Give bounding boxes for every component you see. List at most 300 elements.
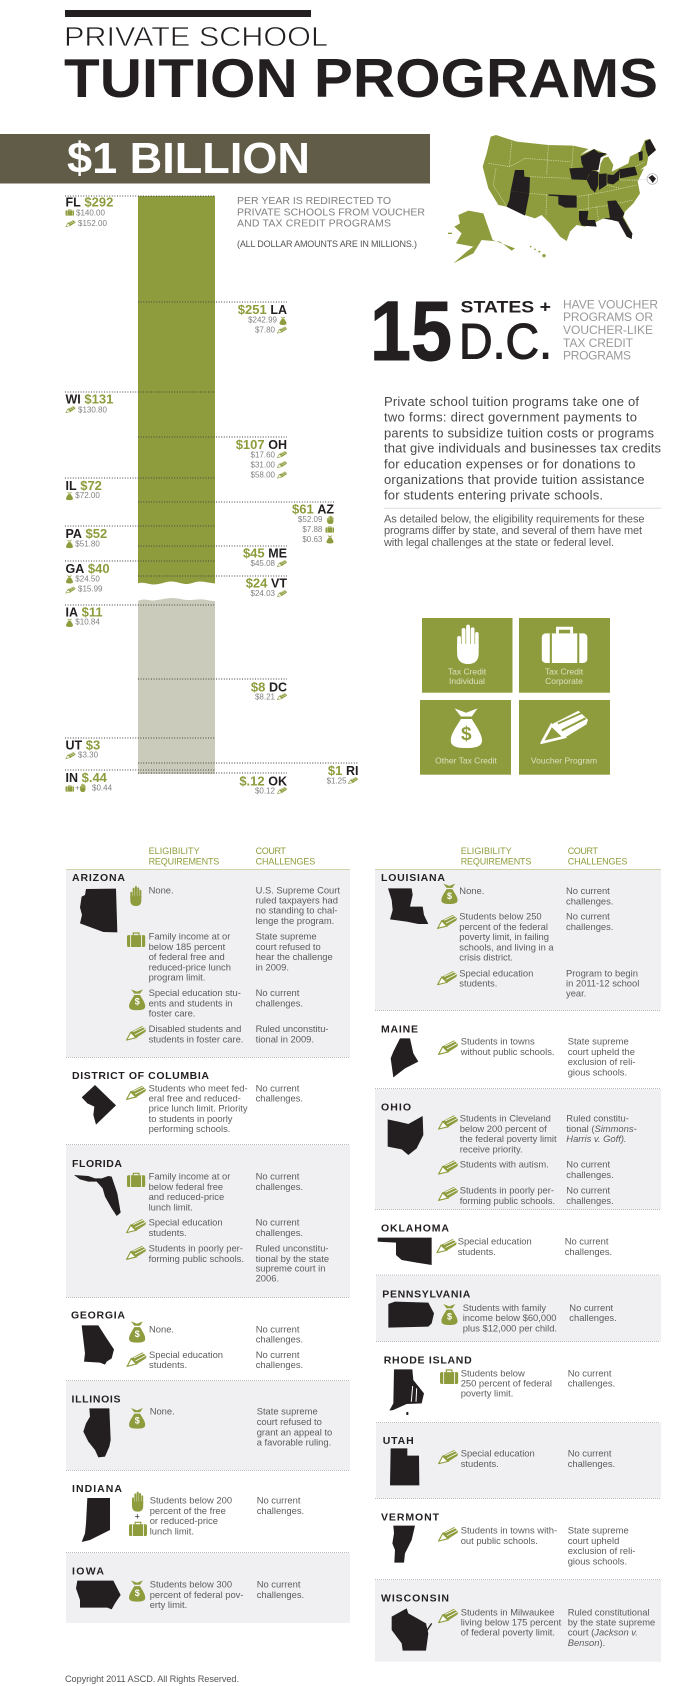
row: other tax credit: No current [257,1579,301,1590]
panel: Illinois [66,1381,350,1470]
row: tax credit individual: lenge the program. [256,915,334,926]
text block: eligibility note: programs differ by state, and several of them have met [384,525,642,537]
panel: Iowa [66,1553,350,1623]
banner: $1 billion: $1 BILLION [67,134,310,183]
title [64,10,658,109]
intro text: per year redirected: PER YEAR IS REDIRECTED TO [237,195,391,207]
row: individual plus corporate tax credit: challenges. [257,1505,304,1516]
legend item: other tax credit: $ [461,724,472,745]
row: other tax credit: $ [135,1588,140,1598]
label: LA: $242.99 [248,316,278,325]
panel: District of Columbia: DISTRICT OF COLUMBIA [72,1070,209,1082]
state shape: Pennsylvania [388,1302,434,1328]
row: other tax credit: Special education stu- [149,987,241,998]
row: voucher program: Ruled unconstitu- [256,1023,329,1034]
label: FL [66,195,113,228]
panel: Florida [66,1145,350,1298]
row: voucher special education: challenges. [256,1227,303,1238]
row: tax credit corporate: No current [256,1171,300,1182]
banner: $1 billion [0,134,430,184]
row: voucher program: students in foster care. [149,1033,243,1044]
intro text: per year redirected [237,195,425,249]
row: tax credit individual: ruled taxpayers had [256,894,338,906]
label: UT [66,737,100,760]
callout: 15 states + D.C.: STATES + [460,298,551,316]
row: other tax credit: No current [256,987,300,998]
row: voucher poverty limit: Students below 250 [459,911,542,922]
row: voucher program: State supreme [568,1036,629,1047]
row: tax credit corporate [440,1367,615,1399]
row: voucher special education [127,1217,303,1238]
label: AZ [292,502,334,544]
row: voucher poverty limit: schools, and living in a [459,941,554,952]
row: voucher program: Students in towns with- [461,1525,557,1536]
state shape: Georgia [82,1325,114,1365]
row: voucher autism [439,1159,614,1180]
text block: program forms: that give individuals and businesses tax credits [384,441,662,456]
label: WI: $130.80 [78,406,107,415]
row: voucher program [127,1349,303,1370]
row: voucher program: Special education [458,1236,532,1247]
row: voucher program: No current [256,1082,300,1093]
row: other tax credit: challenges. [256,997,303,1008]
panel: Georgia [71,1310,303,1370]
row: voucher special education: No current [256,1217,300,1228]
row: voucher Cleveland: the federal poverty limit [460,1133,557,1144]
legend: program types [420,618,610,775]
row: individual plus corporate tax credit: + [135,1512,140,1522]
legend item: tax credit corporate [519,618,610,693]
state shape: Maine [391,1038,418,1077]
row: other tax credit: a favorable ruling. [257,1436,331,1448]
panel: Indiana [72,1483,304,1542]
legend item: tax credit corporate: Tax Credit [545,666,584,676]
row: tax credit individual: no standing to chal- [256,905,337,916]
intro text: per year redirected: AND TAX CREDIT PROGRAMS [237,218,391,230]
label: AZ: $7.88 [302,525,323,534]
text block: program forms: Private school tuition programs take one of [384,394,639,409]
row: voucher poverty limit: crisis district. [459,952,513,962]
row: tax credit corporate: Family income at or [149,1171,230,1182]
label: IN: + [75,783,80,792]
row: other tax credit: Students with family [463,1302,546,1313]
state shape: Arizona [80,889,117,932]
panel: Indiana: INDIANA [72,1483,122,1495]
row: voucher program [127,1082,303,1134]
row: voucher program: living below 175 percent [461,1616,562,1628]
row: voucher program: challenges. [256,1092,303,1104]
row: voucher poorly performing: No current [566,1185,610,1196]
row: voucher program: Ruled constitutional [568,1606,650,1617]
label: IN [66,770,113,792]
state shape: District of Columbia [82,1085,116,1125]
label: GA: $15.99 [78,585,103,594]
row: voucher special education [438,967,639,999]
column headers: right: REQUIREMENTS [461,857,531,867]
state shape: Rhode Island [389,1369,424,1415]
callout: 15 states + D.C.: 15 [370,284,452,378]
row: other tax credit: None. [150,1406,175,1417]
text block: program forms: for education expenses or for donations to [384,456,636,471]
row: voucher program: Benson). [568,1637,605,1648]
row: voucher autism: Students with autism. [460,1159,549,1170]
gray bar segment [138,598,215,774]
row: voucher program: court upheld the [568,1046,635,1057]
row: other tax credit: $ [135,1416,140,1426]
label: OH: $31.00 [251,460,276,469]
panel: Arizona: ARIZONA [72,872,125,884]
row: voucher program [437,1236,612,1257]
row: voucher program: Special education [461,1448,535,1459]
row: voucher poorly performing: forming public schools. [149,1253,244,1264]
row: voucher special education: Special education [149,1217,223,1228]
row: other tax credit: percent of federal pov- [150,1589,244,1600]
label: OH: $17.60 [251,450,276,459]
row: voucher program: Disabled students and [149,1023,241,1034]
label: RI: $1.25 [327,776,347,785]
label: DC [251,679,287,701]
contiguous states [483,135,658,241]
legend item: tax credit individual: Tax Credit [448,666,487,676]
row: other tax credit: challenges. [257,1589,304,1600]
row: tax credit individual: None. [149,884,174,895]
row: other tax credit [129,1579,304,1610]
row: individual plus corporate tax credit [129,1492,304,1536]
row: voucher poverty limit [438,911,613,962]
row: voucher program: challenges. [565,1246,612,1257]
row: tax credit corporate: challenges. [256,1181,303,1192]
row: voucher program: Special education [149,1349,223,1360]
column headers: left [149,846,315,867]
row: voucher program: Students in Milwaukee [461,1606,555,1617]
row: voucher program: out public schools. [461,1535,538,1546]
panel: Louisiana [375,870,661,1010]
row: other tax credit [129,987,303,1018]
row: voucher special education: Special education [459,967,533,978]
row: voucher program: eral free and reduced- [149,1092,241,1104]
column headers: left: ELIGIBILITY [149,846,200,856]
row: other tax credit: $ [135,1329,140,1339]
row: voucher poorly performing [439,1185,614,1206]
label: VT [246,576,287,598]
row: other tax credit: court refused to [257,1416,322,1427]
row: individual plus corporate tax credit: lunch limit. [150,1525,194,1536]
row: voucher program: gious schools. [568,1066,627,1077]
label: OK: $.12 OK [239,773,287,788]
state shape: Ohio [388,1116,423,1155]
copyright: Copyright 2011 ASCD. All Rights Reserved. [65,1674,239,1684]
label: ME: $45 ME [243,546,287,561]
row: tax credit corporate: State supreme [256,931,317,942]
row: voucher autism: challenges. [566,1169,614,1180]
label: AZ: $0.63 [302,535,323,544]
panel: Wisconsin: WISCONSIN [381,1593,449,1605]
row: voucher Cleveland: Harris v. Goff). [566,1133,627,1144]
column headers: left: CHALLENGES [256,857,315,867]
label: WI [66,391,113,415]
row: voucher Cleveland: tional (Simmons- [566,1123,637,1134]
panel: Pennsylvania [376,1276,661,1341]
row: voucher program: No current [256,1349,300,1360]
row: voucher poorly performing: supreme court in [256,1263,325,1274]
label: GA: GA $40 [66,561,110,576]
Alaska and Hawaii [448,211,546,263]
state shape: Utah [390,1448,419,1485]
row: voucher program [127,1023,329,1044]
row: voucher program: by the state supreme [568,1616,655,1628]
text block: eligibility note [383,513,644,549]
row: other tax credit: grant an appeal to [257,1426,332,1437]
label: LA [238,302,287,335]
text block: program forms: for students entering private schools. [384,487,603,502]
row: voucher program: students. [458,1246,496,1257]
row: other tax credit: income below $60,000 [463,1312,557,1323]
column headers: right: COURT [568,846,598,856]
title: TUITION PROGRAMS [64,47,658,109]
label: IN: IN $.44 [66,770,108,785]
column headers: left: REQUIREMENTS [149,857,219,867]
row: tax credit corporate: program limit. [149,972,205,982]
panel: Florida: FLORIDA [72,1158,122,1170]
state shape: Wisconsin [392,1608,432,1651]
panel: Pennsylvania: PENNSYLVANIA [382,1288,471,1300]
row: voucher poorly performing: Students in poorly per- [149,1243,243,1254]
row: tax credit corporate [127,1171,303,1212]
callout: 15 states + D.C. [370,284,658,378]
callout: 15 states + D.C.: PROGRAMS OR [563,310,653,324]
label: IA: IA $11 [66,605,103,620]
panel: Utah: UTAH [383,1435,414,1447]
row: other tax credit: None. [149,1323,174,1334]
state shape: Louisiana [388,888,428,924]
panel: Oklahoma: OKLAHOMA [381,1222,449,1234]
row: other tax credit: challenges. [566,895,613,906]
row: voucher poverty limit: poverty limit, in failing [459,931,549,942]
panel: Utah [376,1423,661,1498]
label: OH [236,437,287,480]
row: other tax credit: Students below 300 [150,1579,232,1590]
panel: Rhode Island: RHODE ISLAND [384,1354,472,1366]
row: voucher Cleveland [439,1113,637,1154]
row: voucher program: students. [461,1458,499,1469]
row: voucher poverty limit: percent of the federal [459,921,548,932]
panel: Ohio: OHIO [381,1101,411,1113]
row: tax credit individual: U.S. Supreme Court [256,884,340,895]
row: voucher program [439,1525,635,1566]
label: LA: $7.80 [255,326,276,335]
row: other tax credit: $ [135,996,140,1006]
row: tax credit corporate: of federal free and [149,951,225,962]
label: IN: $0.44 [92,783,113,792]
row: voucher program: challenges. [568,1458,615,1469]
row: voucher autism: No current [566,1159,610,1170]
label: VT: $24.03 [251,589,276,598]
row: tax credit corporate: Family income at or [149,931,230,942]
row: individual plus corporate tax credit: or reduced-price [150,1515,218,1526]
row: voucher poorly performing [127,1243,329,1284]
column headers: right: ELIGIBILITY [461,846,512,856]
row: voucher program: gious schools. [568,1555,627,1566]
panel: Maine: MAINE [381,1023,418,1035]
row: voucher program: challenges. [256,1359,303,1370]
row: voucher program: tional in 2009. [256,1033,314,1044]
label: VT: $24 VT [246,576,287,591]
callout: 15 states + D.C.: HAVE VOUCHER [563,297,658,311]
row: tax credit corporate: in 2009. [256,961,289,972]
row: other tax credit: challenges. [569,1312,617,1323]
row: tax credit corporate: reduced-price lunch [149,961,231,972]
row: voucher Cleveland: receive priority. [460,1143,523,1154]
label: IA: $10.84 [75,618,100,627]
row: other tax credit [129,1321,303,1344]
label: GA [66,561,110,594]
legend item: other tax credit [420,700,511,775]
label: WI: WI $131 [66,391,113,406]
panel: Vermont: VERMONT [381,1511,440,1523]
row: voucher program [439,1606,655,1648]
row: tax credit corporate: below federal free [149,1181,223,1192]
state shape: Illinois [83,1408,111,1457]
label: IL: IL $72 [66,478,102,493]
legend item: other tax credit: Other Tax Credit [435,755,498,765]
column headers: right: CHALLENGES [568,857,627,867]
row: other tax credit [441,884,613,906]
column headers: right [461,846,627,867]
row: tax credit corporate: No current [568,1367,612,1378]
row: tax credit corporate: lunch limit. [149,1201,193,1212]
row: voucher poorly performing: Students in poorly per- [460,1185,554,1196]
panel: Vermont [381,1511,635,1566]
label: DC: $8.21 [255,692,276,701]
row: voucher poverty limit: challenges. [566,921,613,932]
row: voucher Cleveland: below 200 percent of [460,1123,547,1134]
label: IL [66,478,102,500]
intro text: per year redirected: (ALL DOLLAR AMOUNTS ARE IN MILLIONS.) [237,239,417,249]
label: UT: $3.30 [78,751,99,760]
row: tax credit corporate: challenges. [568,1378,615,1388]
row: voucher program: Students who meet fed- [149,1082,248,1093]
row: tax credit corporate: poverty limit. [461,1388,513,1399]
row: voucher program: without public schools. [460,1046,555,1057]
row: other tax credit: challenges. [256,1334,303,1344]
label: DC: $8 DC [251,679,287,694]
legend item: voucher program [519,700,610,775]
row: voucher program: State supreme [568,1525,629,1536]
label: AZ: $61 AZ [292,502,334,517]
panel: Iowa: IOWA [72,1566,104,1578]
row: tax credit individual [130,884,340,926]
state shape: Oklahoma [378,1238,432,1265]
title: PRIVATE SCHOOL [64,21,328,52]
row: tax credit corporate: court refused to [256,941,321,952]
text block: program forms: two forms: direct government payments to [384,410,637,425]
row: other tax credit: ents and students in [149,997,233,1008]
row: voucher program: No current [565,1236,609,1247]
state shape: Indiana [82,1498,110,1542]
label: PA: PA $52 [66,526,107,541]
row: voucher program: students. [149,1359,187,1370]
label: RI [327,763,358,785]
bar chart: program spending by state [65,195,358,795]
row: voucher Cleveland: Ruled constitu- [566,1113,629,1124]
label: OH: $58.00 [251,471,276,480]
row: voucher special education: year. [566,988,586,999]
row: other tax credit [129,1406,332,1448]
row: other tax credit: plus $12,000 per child. [463,1322,557,1333]
panel: Illinois: ILLINOIS [72,1393,120,1405]
row: tax credit corporate: and reduced-price [149,1191,224,1202]
label: ME [243,546,287,568]
text block: program forms: organizations that provide tuition assistance [384,472,644,487]
row: individual plus corporate tax credit: percent of the free [150,1505,226,1516]
row: tax credit corporate: below 185 percent [149,941,226,952]
label: GA: $24.50 [75,574,100,583]
row: voucher poverty limit: No current [566,911,610,922]
row: voucher program: of federal poverty limit. [461,1627,555,1638]
row: other tax credit: $ [447,891,452,901]
label: FL: FL $292 [66,195,113,210]
label: PA [66,526,107,548]
label: IA [66,605,103,627]
row: other tax credit: No current [256,1323,300,1334]
row: voucher program: performing schools. [149,1123,230,1134]
row: voucher poorly performing: challenges. [566,1195,614,1206]
row: other tax credit: State supreme [257,1406,318,1417]
row: voucher program: price lunch limit. Priority [149,1103,248,1114]
row: voucher special education: students. [459,978,497,988]
row: voucher special education: in 2011-12 school [566,978,639,988]
panel: Arizona [66,870,350,1057]
row: voucher program [439,1448,615,1469]
row: voucher program: No current [568,1448,612,1459]
row: voucher program: court (Jackson v. [568,1627,638,1638]
row: individual plus corporate tax credit: No current [257,1495,301,1506]
label: UT: UT $3 [66,737,100,752]
legend item: tax credit corporate: Corporate [545,676,583,686]
panel: Rhode Island [384,1354,615,1415]
green bar segment [138,196,215,584]
label: LA: $251 LA [238,302,287,317]
row: voucher program: to students in poorly [149,1113,233,1124]
row: other tax credit: $ [447,1312,452,1322]
callout: 15 states + D.C.: TAX CREDIT [563,336,634,350]
callout: 15 states + D.C.: D.C. [459,314,552,370]
text block: program forms [384,394,662,502]
text block: eligibility note: with legal challenges at the state or federal level. [383,537,614,549]
row: voucher poorly performing: forming public schools. [460,1195,555,1206]
state shape: Vermont [392,1526,415,1563]
row: tax credit corporate: hear the challenge [256,951,333,962]
row: voucher program [439,1036,635,1077]
legend item: tax credit individual [422,618,512,693]
text block: eligibility note: As detailed below, the eligibility requirements for these [384,513,644,525]
row: voucher special education: students. [149,1227,187,1238]
label: FL: $152.00 [78,219,107,228]
panel: Louisiana: LOUISIANA [381,872,445,884]
row: voucher program: exclusion of reli- [568,1545,635,1556]
panel: Wisconsin [375,1580,661,1662]
row: other tax credit: foster care. [149,1007,196,1018]
callout: 15 states + D.C.: VOUCHER-LIKE [563,323,653,337]
panel: Maine [381,1023,635,1077]
label: AZ: $52.09 [298,515,323,524]
row: tax credit corporate: Students below [461,1367,525,1378]
state shape: Florida [74,1175,121,1216]
row: voucher program: Students in towns [461,1036,535,1047]
label: OK [239,773,287,795]
label: ME: $45.08 [251,559,276,568]
row: voucher poorly performing: 2006. [256,1273,279,1284]
